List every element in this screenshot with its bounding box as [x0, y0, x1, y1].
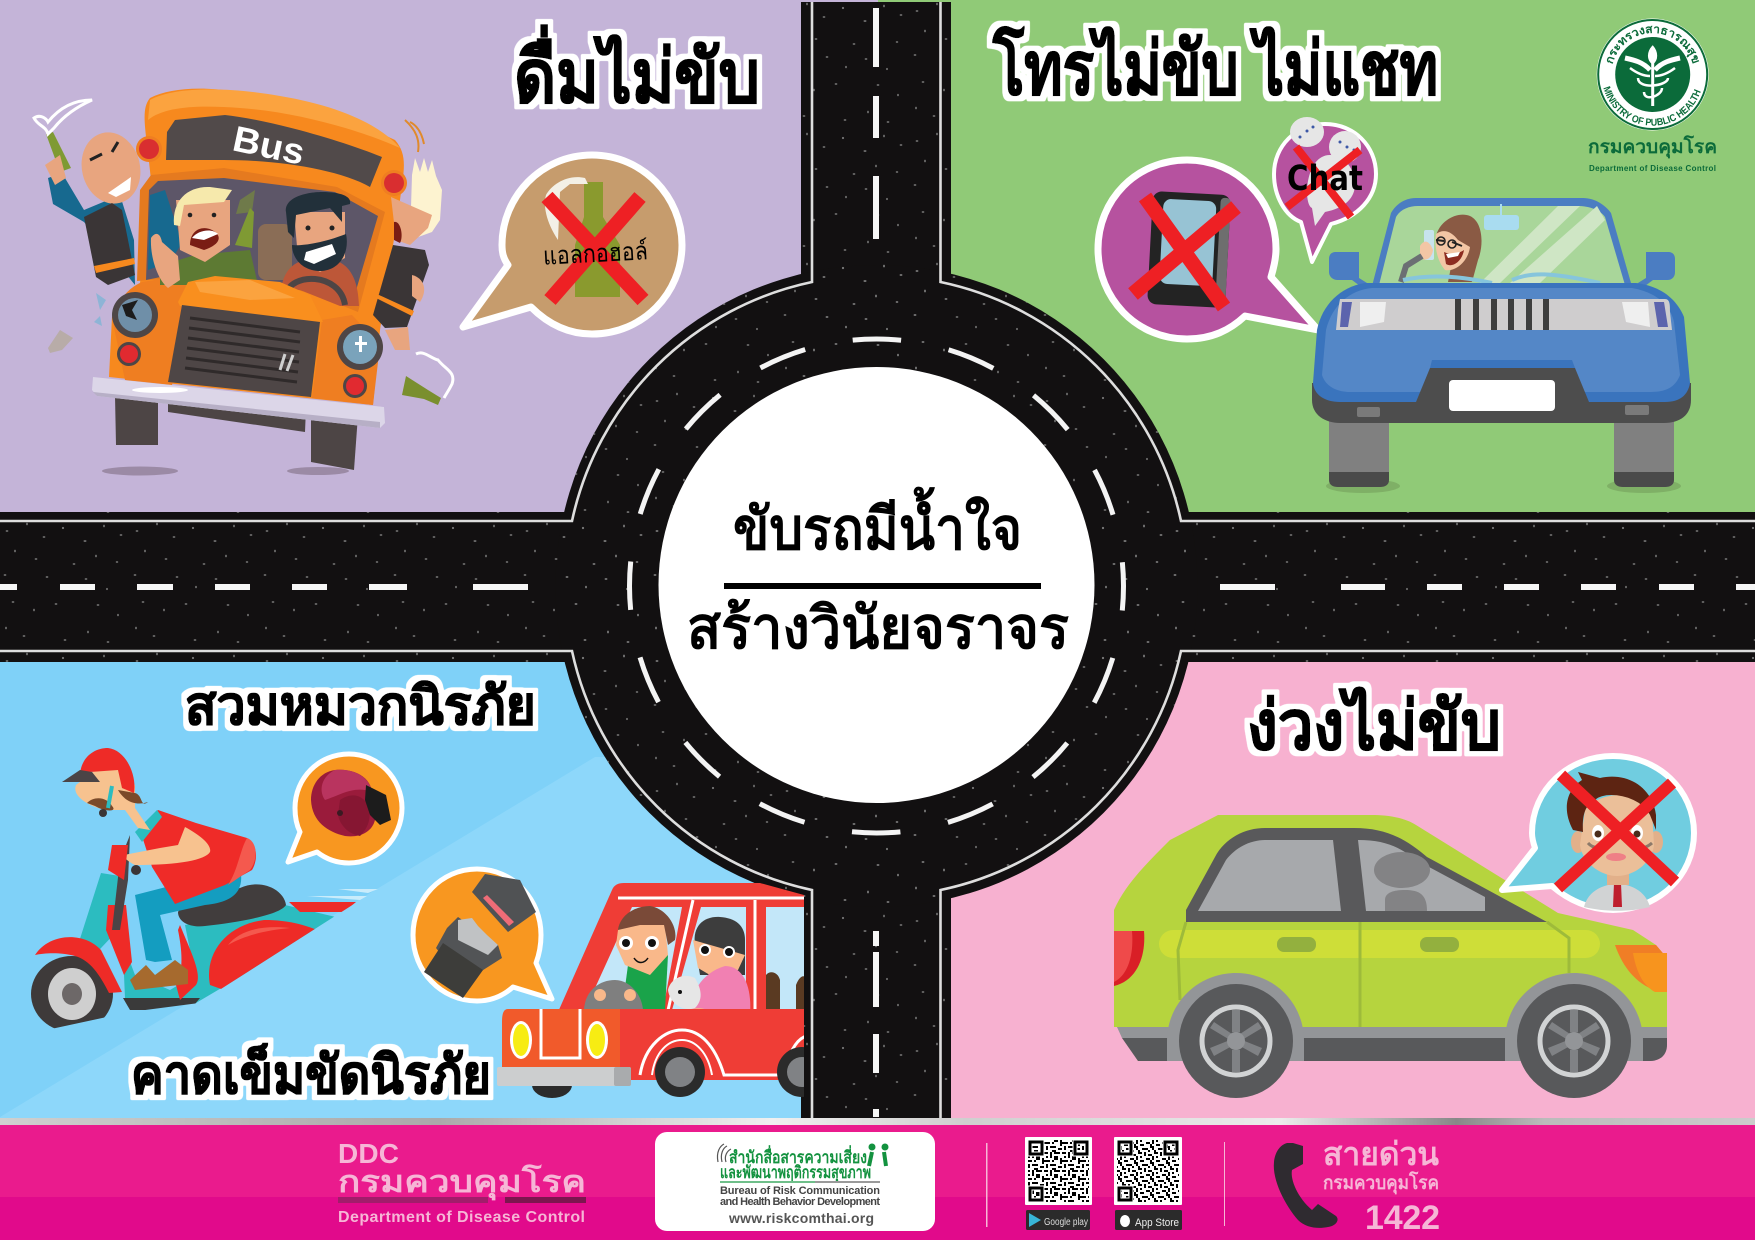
department name block: Department of Disease Control [338, 1209, 585, 1226]
bubble: seatbelt [413, 869, 552, 1001]
scooter body [78, 873, 340, 1003]
centre white circle with slogan [658, 367, 1094, 803]
heading: no drink driving: ดื่มไม่ขับ [514, 24, 760, 118]
bubble: no drowsy driving [1502, 756, 1694, 911]
icon: phone [1147, 191, 1231, 308]
roundabout lane dashes [630, 339, 1124, 833]
badge: App Store [1115, 1210, 1182, 1230]
rider shoes [130, 960, 188, 990]
slogan divider [724, 583, 1041, 589]
illustration: scooter rider [31, 748, 378, 1032]
icon: red cross [1133, 197, 1236, 307]
seal top text: กระทรวงสาธารณสุข [1606, 26, 1700, 64]
bureau logo card: สำนักสื่อสารความเสี่ยง [729, 1145, 867, 1167]
bus hood [178, 276, 323, 322]
bald passenger [34, 100, 148, 285]
rear wheels [655, 1047, 705, 1097]
body trim [1159, 930, 1600, 958]
front fender [35, 937, 122, 993]
bureau logo card: www.riskcomthai.org [728, 1210, 874, 1226]
passenger and dog [668, 916, 750, 1009]
slogan line 1: ขับรถมีน้ำใจ [733, 487, 1022, 562]
icon: telephone handset [1274, 1143, 1338, 1228]
seat [178, 884, 286, 926]
number plate recess [1416, 368, 1589, 402]
icon: red cross [547, 197, 643, 300]
badge: Google Play: Google play [1044, 1217, 1088, 1228]
front wheel and bumper [532, 1086, 572, 1098]
illustration: red car with family [497, 883, 827, 1098]
windshield [137, 168, 385, 312]
driver [584, 906, 675, 1010]
cabin [558, 883, 804, 1012]
panel: drink driving background [0, 0, 878, 520]
icon: red cross [1287, 147, 1360, 217]
driver [1401, 215, 1600, 283]
bubble: no alcohol [463, 155, 682, 334]
bus headlights [112, 292, 383, 398]
sill [1117, 1027, 1667, 1038]
bubble: helmet [288, 754, 402, 863]
heading: no phone or chat: โทรไม่ขับ ไม่แชท [992, 25, 1438, 110]
rear seats [766, 972, 806, 1010]
footer bar [0, 1125, 1755, 1240]
illustration: blue car with phoning driver [1312, 198, 1691, 493]
side mirrors [84, 203, 135, 285]
bureau logo card [655, 1132, 935, 1231]
wheels [1167, 973, 1643, 1098]
bureau logo card: and Health Behavior Development [720, 1196, 880, 1208]
hotline text [1323, 1136, 1440, 1237]
alcohol label: แอลกอฮอล์ [542, 237, 649, 271]
blond side passenger [391, 158, 442, 245]
windshield frame [1371, 198, 1633, 290]
bus bumper [92, 377, 385, 428]
rider leg [135, 868, 241, 962]
department name block: DDC [338, 1138, 399, 1169]
heading: fasten seatbelt: คาดเข็มขัดนิรภัย [131, 1043, 491, 1105]
hotline text: 1422 [1365, 1199, 1440, 1237]
seal bottom text: MINISTRY OF PUBLIC HEALTH [1604, 86, 1701, 126]
heading: wear helmet: สวมหมวกนิรภัย [185, 677, 536, 736]
tail light [1114, 931, 1144, 986]
bearded driver [281, 192, 359, 306]
rider shirt [140, 810, 256, 904]
blond passenger [151, 187, 258, 288]
bus destination sign [166, 115, 382, 187]
QR code: Google Play [1025, 1137, 1092, 1205]
department name block: กรมควบคุมโรค [338, 1163, 586, 1201]
front wheel [31, 956, 113, 1032]
badge: App Store: App Store [1135, 1217, 1179, 1229]
front grille band [1336, 299, 1672, 330]
dead-eyed rear passenger [258, 224, 292, 280]
speed lines [307, 889, 378, 900]
hotline text: กรมควบคุมโรค [1323, 1171, 1439, 1195]
bus grille [168, 305, 320, 397]
panel: helmet and seatbelt background [0, 655, 878, 1125]
icon: helmet [311, 770, 391, 836]
icon: bottle [575, 182, 620, 297]
silver strip [0, 1118, 1755, 1125]
bus label: Bus [229, 118, 308, 173]
bureau logo card: และพัฒนาพฤติกรรมสุขภาพ [720, 1163, 871, 1183]
bureau logo card: Bureau of Risk Communication [720, 1185, 880, 1197]
drowsy man [1567, 772, 1663, 911]
badge: Google Play [1026, 1210, 1090, 1230]
front light [1615, 945, 1667, 992]
car body [1312, 383, 1691, 423]
panel: phone driving background [878, 0, 1755, 520]
illustration: drunk bus [34, 89, 453, 476]
logo label: department of disease control english: Department of Disease Control [1589, 164, 1716, 173]
hotline text: สายด่วน [1323, 1136, 1439, 1172]
bubble: no phone [1098, 160, 1318, 339]
rider head [75, 770, 150, 830]
chat label: Chat [1287, 159, 1363, 199]
slogan line 2: สร้างวินัยจราจร [687, 596, 1069, 661]
icon: buckle [424, 874, 536, 998]
department name block [338, 1138, 586, 1226]
illustration: green car with drowsy driver [1114, 815, 1667, 1098]
car windows [1186, 828, 1547, 922]
logo label: department of disease control thai: กรมควบคุมโรค [1588, 135, 1717, 159]
caduceus emblem [1625, 46, 1680, 106]
car lower body [619, 1009, 806, 1080]
QR code: App Store [1114, 1137, 1182, 1205]
heading: no drowsy driving: ง่วงไม่ขับ [1247, 686, 1501, 764]
flying bottles [402, 376, 441, 405]
logo: ministry of public health seal [1596, 18, 1709, 130]
bus wheels [115, 396, 158, 445]
icon: red cross [1558, 775, 1675, 888]
rider arm [123, 827, 210, 865]
side mirrors [1329, 252, 1375, 292]
bubble: no chat [1274, 117, 1376, 262]
panel: drowsy driving background [878, 655, 1755, 1125]
chat cloud icons [1290, 117, 1361, 226]
headlights [510, 1021, 532, 1059]
